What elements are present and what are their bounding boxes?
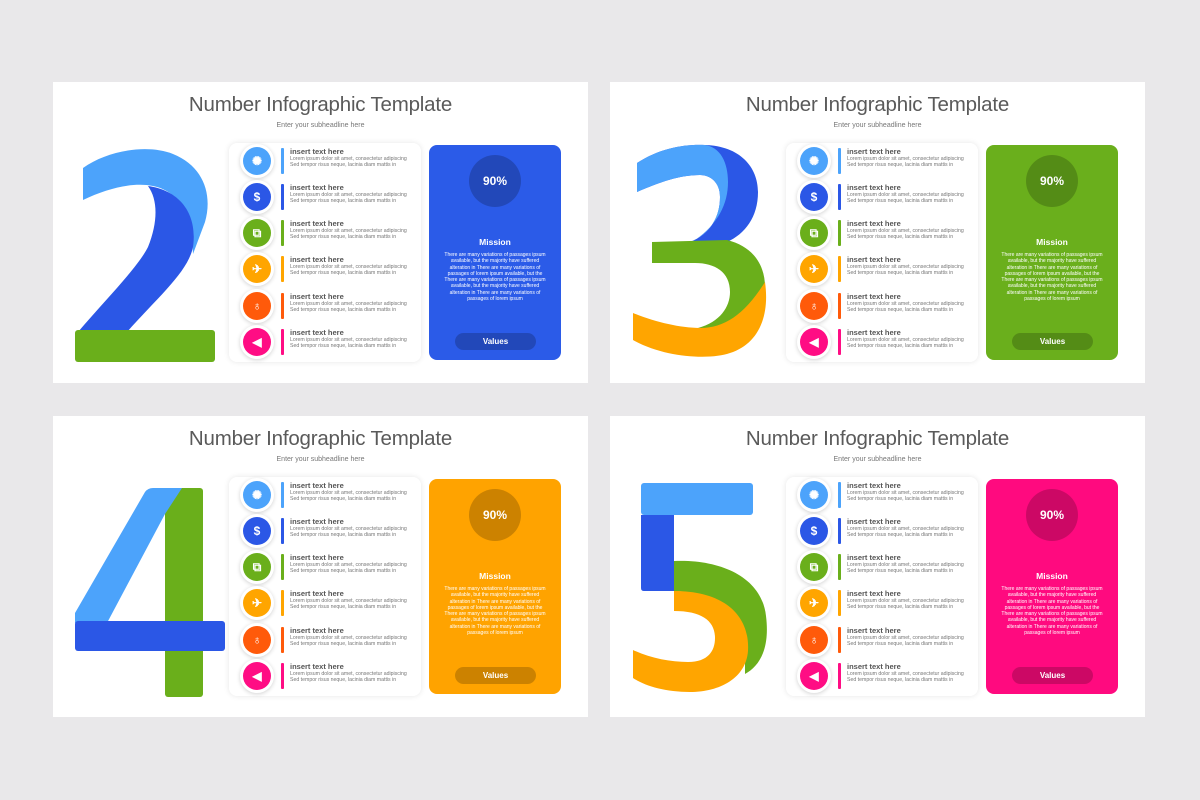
list panel: insert text here xyxy=(847,292,901,301)
mission card: Mission xyxy=(1036,571,1068,581)
list panel: Sed tempor risus neque, lacinia diam mattis in xyxy=(847,234,953,240)
list panel: Sed tempor risus neque, lacinia diam mattis in xyxy=(847,496,953,502)
slide: number 3 xyxy=(610,82,1145,383)
list panel: $ xyxy=(254,190,260,204)
subtitle: Enter your subheadline here xyxy=(834,122,921,129)
list panel: Sed tempor risus neque, lacinia diam mattis in xyxy=(290,343,396,349)
list panel: ◀ xyxy=(252,335,262,349)
list panel: Lorem ipsum dolor sit amet, consectetur adipiscing xyxy=(847,635,964,641)
mission card: 90% xyxy=(483,174,507,188)
list panel: Lorem ipsum dolor sit amet, consectetur adipiscing xyxy=(847,598,964,604)
list panel: Sed tempor risus neque, lacinia diam mattis in xyxy=(290,162,396,168)
list panel: Sed tempor risus neque, lacinia diam mattis in xyxy=(290,568,396,574)
list panel: Sed tempor risus neque, lacinia diam mattis in xyxy=(847,307,953,313)
list panel: ◀ xyxy=(809,669,819,683)
list panel: Lorem ipsum dolor sit amet, consectetur adipiscing xyxy=(290,562,407,568)
slide: number 2 xyxy=(53,82,588,383)
list panel: ✺ xyxy=(809,154,819,168)
list panel: insert text here xyxy=(847,183,901,192)
slide: number 4 xyxy=(53,416,588,717)
list panel xyxy=(229,477,421,696)
slide: number 5 xyxy=(610,416,1145,717)
list panel: insert text here xyxy=(847,626,901,635)
list panel: Lorem ipsum dolor sit amet, consectetur adipiscing xyxy=(847,671,964,677)
list panel: Lorem ipsum dolor sit amet, consectetur adipiscing xyxy=(847,490,964,496)
list panel: ♁ xyxy=(810,299,818,313)
mission card: There are many variations of passages ipsum available, but the majority have suffered alteration in There are many variations of passages of lorem ipsum available, but the There are many variations of passages ipsum available, but the majority have suffered alteration in There are many variations of passages of lorem ipsum xyxy=(444,252,546,302)
list panel: insert text here xyxy=(290,481,344,490)
list panel: Sed tempor risus neque, lacinia diam mattis in xyxy=(290,532,396,538)
list panel xyxy=(786,143,978,362)
list panel: insert text here xyxy=(847,481,901,490)
list panel: insert text here xyxy=(290,626,344,635)
title: Number Infographic Template xyxy=(746,93,1009,116)
mission card: 90% xyxy=(483,508,507,522)
list panel: ✺ xyxy=(252,488,262,502)
mission card: Values xyxy=(483,671,508,680)
list panel: Lorem ipsum dolor sit amet, consectetur adipiscing xyxy=(290,635,407,641)
mission card: 90% xyxy=(1040,508,1064,522)
list panel: ✈ xyxy=(252,262,262,276)
list panel: ♁ xyxy=(810,633,818,647)
list panel: $ xyxy=(811,190,817,204)
title: Number Infographic Template xyxy=(746,427,1009,450)
subtitle: Enter your subheadline here xyxy=(277,456,364,463)
subtitle: Enter your subheadline here xyxy=(277,122,364,129)
list panel: insert text here xyxy=(290,553,344,562)
list panel: Sed tempor risus neque, lacinia diam mattis in xyxy=(290,270,396,276)
list panel: insert text here xyxy=(847,328,901,337)
mission card xyxy=(429,145,561,360)
list panel: ✈ xyxy=(809,262,819,276)
list panel: Lorem ipsum dolor sit amet, consectetur adipiscing xyxy=(290,337,407,343)
list panel: ♁ xyxy=(252,299,262,313)
list panel: Lorem ipsum dolor sit amet, consectetur adipiscing xyxy=(290,264,407,270)
list panel: ✈ xyxy=(809,596,819,610)
mission card: 90% xyxy=(1040,174,1064,188)
list panel xyxy=(786,477,978,696)
list panel: Lorem ipsum dolor sit amet, consectetur adipiscing xyxy=(847,264,964,270)
list panel: insert text here xyxy=(847,147,901,156)
list panel: ♁ xyxy=(252,633,262,647)
list panel: $ xyxy=(254,524,260,538)
list panel: insert text here xyxy=(847,589,901,598)
list panel: Lorem ipsum dolor sit amet, consectetur adipiscing xyxy=(290,301,407,307)
list panel: ⧉ xyxy=(253,226,261,240)
mission card: Values xyxy=(483,337,508,346)
mission card xyxy=(429,479,561,694)
list panel: ✈ xyxy=(252,596,262,610)
list panel: Lorem ipsum dolor sit amet, consectetur adipiscing xyxy=(847,228,964,234)
list panel: insert text here xyxy=(847,553,901,562)
mission card: Mission xyxy=(479,571,511,581)
list panel: Sed tempor risus neque, lacinia diam mattis in xyxy=(290,496,396,502)
list panel: Sed tempor risus neque, lacinia diam mattis in xyxy=(847,604,953,610)
list panel: ◀ xyxy=(809,335,819,349)
list panel: $ xyxy=(811,524,817,538)
mission card: Values xyxy=(1040,337,1065,346)
list panel: insert text here xyxy=(290,255,344,264)
list panel: Sed tempor risus neque, lacinia diam mattis in xyxy=(847,343,953,349)
list panel: Lorem ipsum dolor sit amet, consectetur adipiscing xyxy=(290,598,407,604)
list panel: Lorem ipsum dolor sit amet, consectetur adipiscing xyxy=(290,228,407,234)
list panel: Lorem ipsum dolor sit amet, consectetur adipiscing xyxy=(847,562,964,568)
list panel: Sed tempor risus neque, lacinia diam mattis in xyxy=(847,568,953,574)
mission card: Mission xyxy=(1036,237,1068,247)
list panel: insert text here xyxy=(290,589,344,598)
list panel: Lorem ipsum dolor sit amet, consectetur adipiscing xyxy=(847,156,964,162)
list panel: Sed tempor risus neque, lacinia diam mattis in xyxy=(290,641,396,647)
list panel: insert text here xyxy=(847,517,901,526)
list panel: Lorem ipsum dolor sit amet, consectetur adipiscing xyxy=(290,156,407,162)
mission card: There are many variations of passages ipsum available, but the majority have suffered alteration in There are many variations of passages of lorem ipsum available, but the There are many variations of passages ipsum available, but the majority have suffered alteration in There are many variations of passages of lorem ipsum xyxy=(1001,252,1103,302)
list panel: Sed tempor risus neque, lacinia diam mattis in xyxy=(290,307,396,313)
list panel: ⧉ xyxy=(253,560,261,574)
list panel: Sed tempor risus neque, lacinia diam mattis in xyxy=(290,234,396,240)
list panel: insert text here xyxy=(290,328,344,337)
mission card xyxy=(986,145,1118,360)
list panel: insert text here xyxy=(290,183,344,192)
list panel: insert text here xyxy=(290,662,344,671)
list panel: ◀ xyxy=(252,669,262,683)
list panel: Sed tempor risus neque, lacinia diam mattis in xyxy=(290,198,396,204)
list panel: Sed tempor risus neque, lacinia diam mattis in xyxy=(847,677,953,683)
list panel: ⧉ xyxy=(810,226,818,240)
list panel: Sed tempor risus neque, lacinia diam mattis in xyxy=(847,198,953,204)
title: Number Infographic Template xyxy=(189,93,452,116)
list panel xyxy=(229,143,421,362)
big digit 3 xyxy=(633,144,766,357)
mission card: Mission xyxy=(479,237,511,247)
mission card: There are many variations of passages ipsum available, but the majority have suffered alteration in There are many variations of passages of lorem ipsum available, but the There are many variations of passages ipsum available, but the majority have suffered alteration in There are many variations of passages of lorem ipsum xyxy=(444,586,546,636)
big digit 2 xyxy=(75,149,215,362)
list panel: insert text here xyxy=(290,219,344,228)
mission card: There are many variations of passages ipsum available, but the majority have suffered alteration in There are many variations of passages of lorem ipsum available, but the There are many variations of passages ipsum available, but the majority have suffered alteration in There are many variations of passages of lorem ipsum xyxy=(1001,586,1103,636)
mission card: Values xyxy=(1040,671,1065,680)
list panel: insert text here xyxy=(847,662,901,671)
list panel: Sed tempor risus neque, lacinia diam mattis in xyxy=(290,677,396,683)
mission card xyxy=(986,479,1118,694)
list panel: insert text here xyxy=(847,255,901,264)
list panel: Lorem ipsum dolor sit amet, consectetur adipiscing xyxy=(290,671,407,677)
list panel: Sed tempor risus neque, lacinia diam mattis in xyxy=(847,270,953,276)
title: Number Infographic Template xyxy=(189,427,452,450)
list panel: insert text here xyxy=(290,147,344,156)
list panel: insert text here xyxy=(290,517,344,526)
big digit 4 xyxy=(75,488,225,697)
list panel: ✺ xyxy=(252,154,262,168)
list panel: Lorem ipsum dolor sit amet, consectetur adipiscing xyxy=(290,526,407,532)
subtitle: Enter your subheadline here xyxy=(834,456,921,463)
list panel: Sed tempor risus neque, lacinia diam mattis in xyxy=(847,532,953,538)
list panel: Lorem ipsum dolor sit amet, consectetur adipiscing xyxy=(847,526,964,532)
list panel: Lorem ipsum dolor sit amet, consectetur adipiscing xyxy=(847,337,964,343)
list panel: Sed tempor risus neque, lacinia diam mattis in xyxy=(290,604,396,610)
list panel: Lorem ipsum dolor sit amet, consectetur adipiscing xyxy=(290,490,407,496)
list panel: insert text here xyxy=(847,219,901,228)
list panel: Sed tempor risus neque, lacinia diam mattis in xyxy=(847,162,953,168)
list panel: Sed tempor risus neque, lacinia diam mattis in xyxy=(847,641,953,647)
list panel: ⧉ xyxy=(810,560,818,574)
list panel: Lorem ipsum dolor sit amet, consectetur adipiscing xyxy=(847,301,964,307)
list panel: ✺ xyxy=(809,488,819,502)
list panel: Lorem ipsum dolor sit amet, consectetur adipiscing xyxy=(847,192,964,198)
big digit 5 xyxy=(633,483,767,692)
list panel: Lorem ipsum dolor sit amet, consectetur adipiscing xyxy=(290,192,407,198)
list panel: insert text here xyxy=(290,292,344,301)
